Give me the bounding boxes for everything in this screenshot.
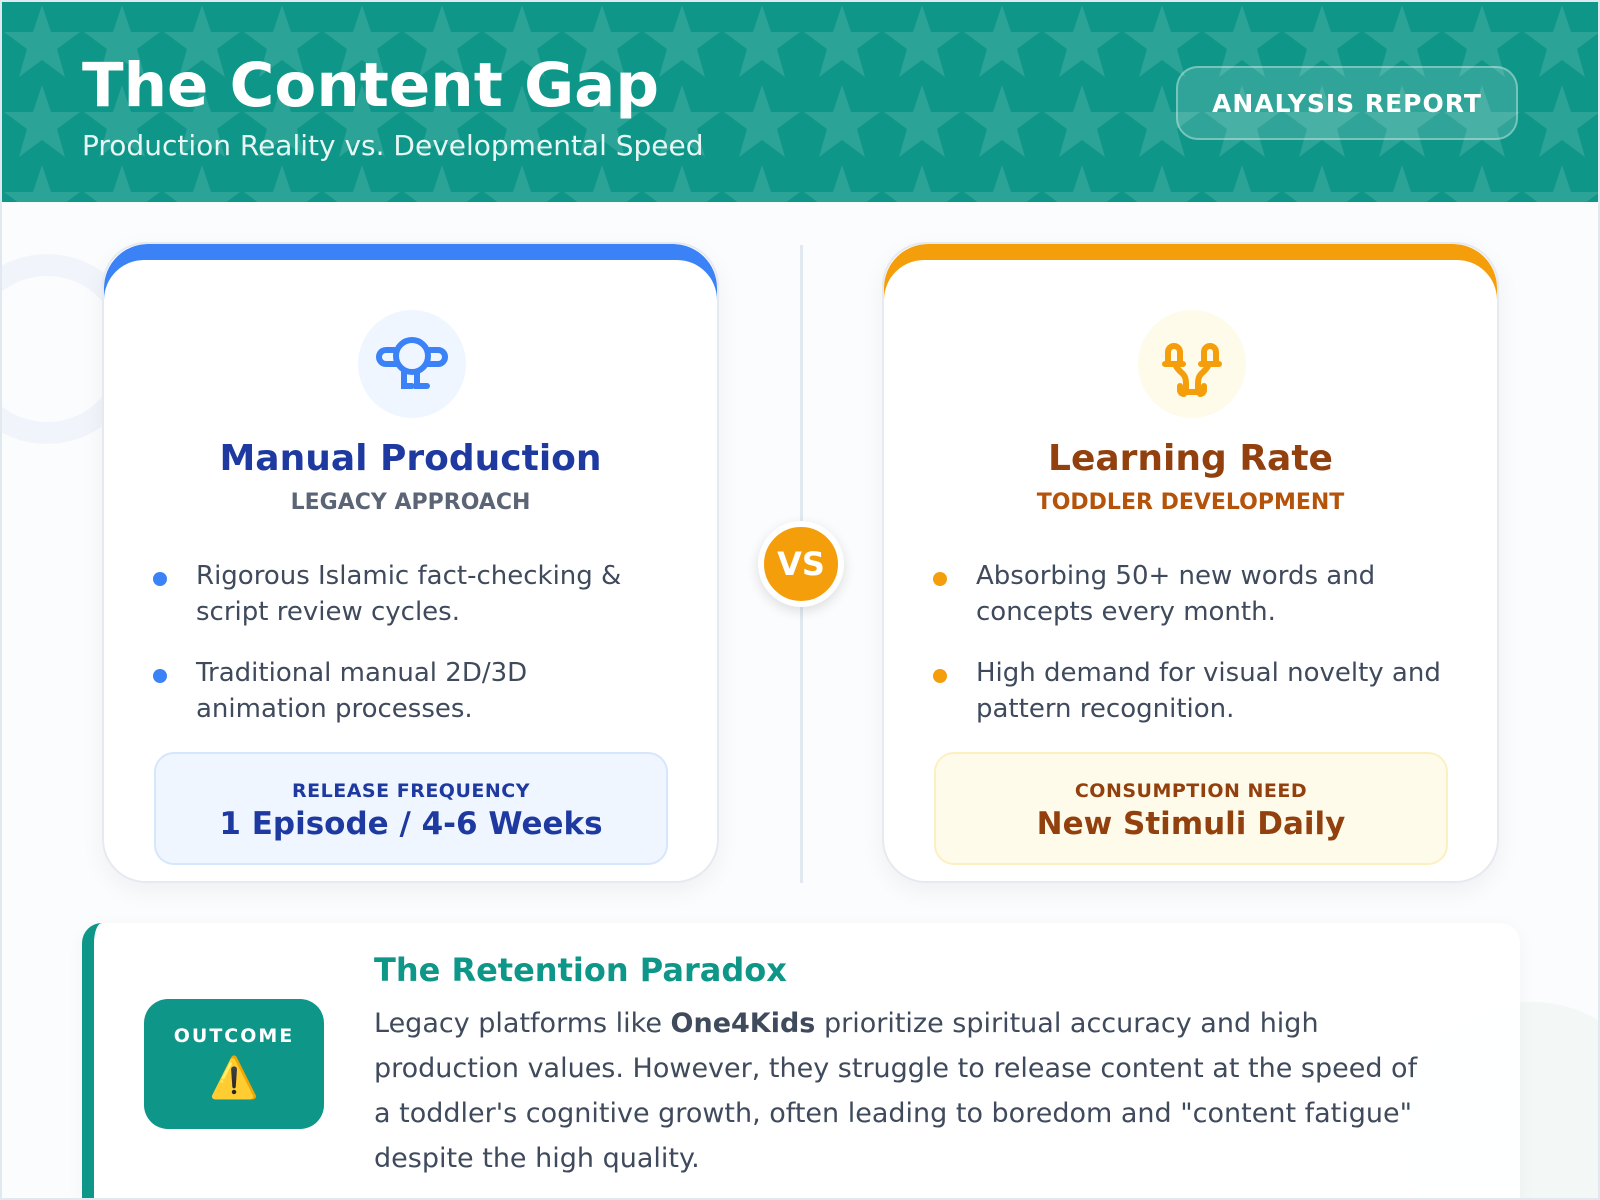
panel: learning rate [882, 242, 1499, 883]
panel: manual production [102, 242, 719, 883]
icon: robot [358, 310, 466, 418]
heading: Manual Production [219, 438, 602, 479]
stat: consumption need: New Stimuli Daily [1037, 806, 1345, 842]
bullet 1: Absorbing 50+ new words and [976, 561, 1375, 591]
stat: consumption need: CONSUMPTION NEED [1075, 780, 1307, 802]
outcome badge: ⚠️ [209, 1045, 259, 1103]
body text: Legacy platforms like One4Kids prioritize spiritual accuracy and high production values. However, they struggle to release content at the speed of a toddler's cognitive growth, often leading to boredom and "content fatigue" despite the high quality. [374, 1008, 1417, 1174]
subheading: LEGACY APPROACH [291, 490, 530, 515]
bullet 2 [153, 658, 527, 724]
stat: release frequency: RELEASE FREQUENCY [292, 780, 530, 802]
divider [800, 245, 803, 883]
bullet 2: pattern recognition. [976, 694, 1234, 724]
bullet 1: script review cycles. [196, 597, 460, 627]
heading: The Retention Paradox [374, 951, 787, 989]
icon: growth [1138, 310, 1246, 418]
stat: release frequency [154, 752, 668, 865]
bullet 2: Traditional manual 2D/3D [196, 658, 527, 688]
bullet 1 [933, 561, 1375, 627]
heading: Learning Rate [1048, 438, 1333, 479]
badge: analysis report [1176, 66, 1518, 140]
bullet 2: High demand for visual novelty and [976, 658, 1441, 688]
title: The Content Gap [82, 50, 659, 121]
bullet 2 [933, 658, 1441, 724]
bullet 2: animation processes. [196, 694, 473, 724]
subheading: TODDLER DEVELOPMENT [1037, 490, 1344, 515]
header banner [2, 2, 1600, 202]
subtitle: Production Reality vs. Developmental Speed [82, 129, 704, 162]
panel: retention paradox [82, 923, 1520, 1198]
bullet 1: concepts every month. [976, 597, 1276, 627]
vs badge: VS [777, 545, 825, 583]
badge: analysis report: ANALYSIS REPORT [1212, 89, 1482, 118]
stat: release frequency: 1 Episode / 4-6 Weeks [219, 806, 603, 842]
vs badge [758, 521, 844, 607]
bullet 1 [153, 561, 621, 627]
outcome badge: OUTCOME [174, 1025, 294, 1047]
bullet 1: Rigorous Islamic fact-checking & [196, 561, 621, 591]
stat: consumption need [934, 752, 1448, 865]
outcome badge [144, 999, 324, 1129]
